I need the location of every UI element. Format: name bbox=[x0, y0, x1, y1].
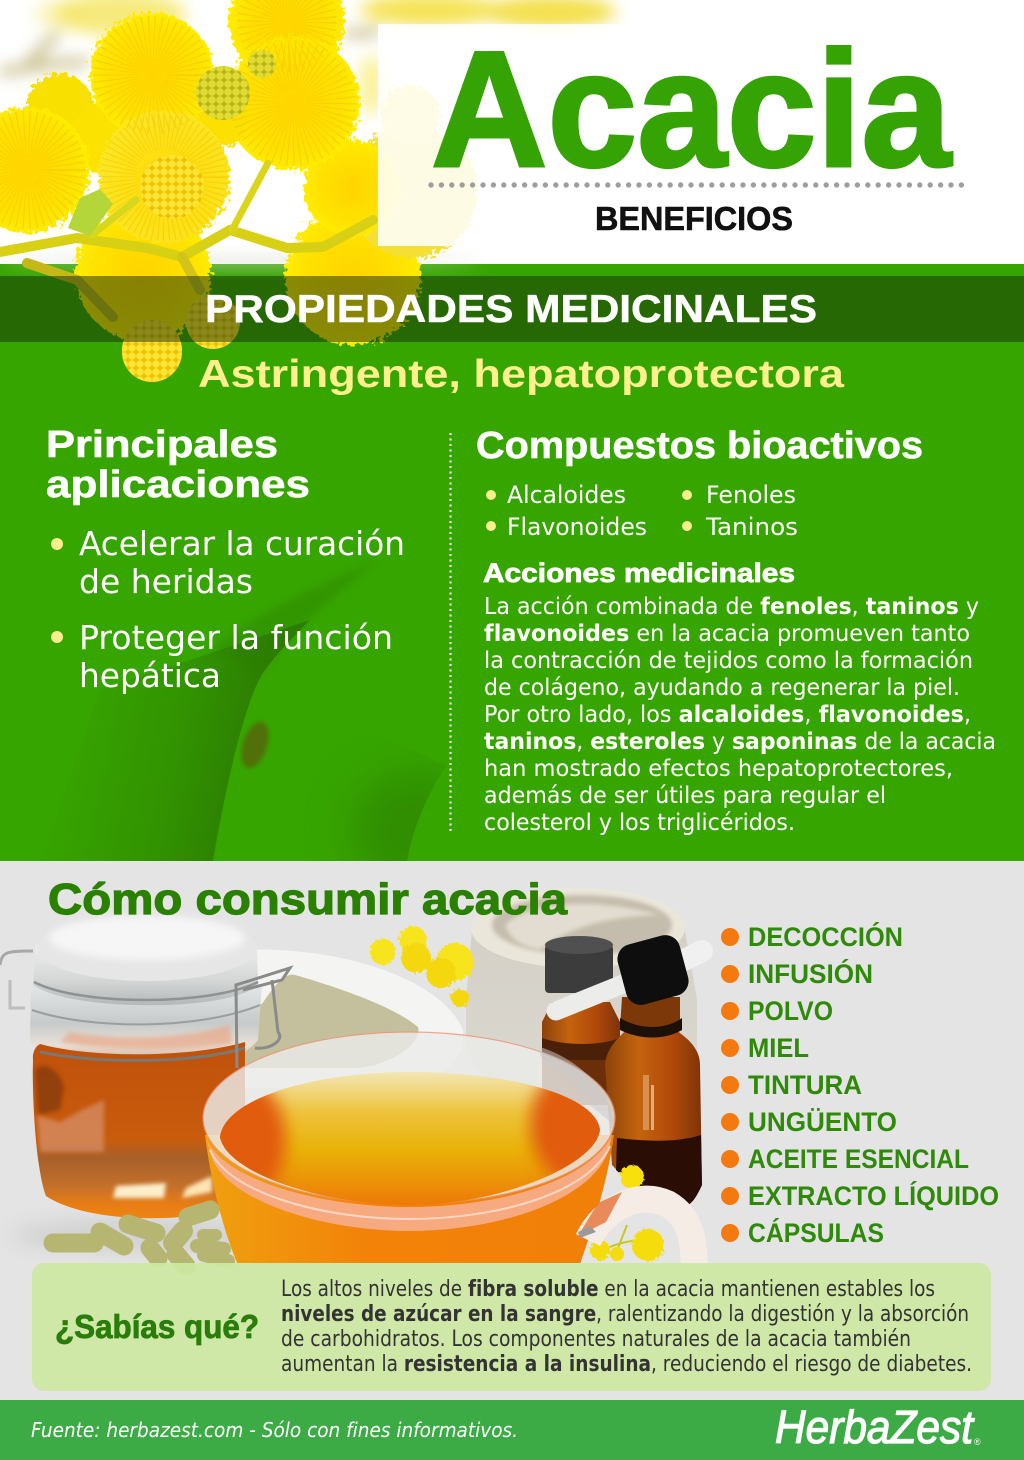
footer bbox=[0, 1400, 1024, 1460]
list: forms of consumption: TINTURA bbox=[748, 1070, 862, 1100]
compound list: Alcaloides bbox=[507, 481, 626, 509]
cup rim bbox=[203, 1032, 615, 1204]
compound list: Taninos bbox=[705, 513, 798, 541]
logo: HerbaZest: HerbaZest bbox=[775, 1401, 975, 1453]
photo: cup handle with flowers bbox=[578, 1165, 694, 1265]
photo: honey jar bbox=[0, 915, 290, 1218]
paragraph: medicinal actions bbox=[484, 594, 996, 836]
tea surface bbox=[220, 1072, 600, 1205]
photo: acacia flower pompoms bbox=[0, 0, 478, 380]
callout text: aumentan la resistencia a la insulina, reduciendo el riesgo de diabetes. bbox=[281, 1352, 972, 1377]
heading: medicinal actions: Acciones medicinales bbox=[483, 558, 795, 588]
column divider bbox=[450, 433, 452, 832]
callout heading: ¿Sabías qué? bbox=[55, 1308, 259, 1345]
photo: large amber bottle bbox=[556, 932, 702, 1205]
list: forms of consumption: UNGÜENTO bbox=[748, 1107, 897, 1137]
front lip bbox=[207, 1135, 612, 1231]
callout text: de carbohidratos. Los componentes naturales de la acacia también bbox=[281, 1327, 911, 1352]
jar neck bbox=[30, 985, 262, 1060]
callout: did you know bbox=[32, 1263, 991, 1391]
dotted divider bbox=[431, 182, 963, 188]
photo: soft floor shadow bbox=[10, 1219, 270, 1251]
bullet two: Proteger la función bbox=[79, 618, 393, 657]
list: forms of consumption: EXTRACTO LÍQUIDO bbox=[748, 1180, 999, 1211]
heading: principal applications: Principales bbox=[46, 424, 278, 466]
panel: green medicinal section bbox=[0, 264, 1024, 890]
paragraph: medicinal actions: la contracción de tejidos como la formación bbox=[484, 648, 973, 674]
dropper tube bbox=[556, 982, 628, 1011]
compound list: Flavonoides bbox=[507, 513, 647, 541]
heading: principal applications: aplicaciones bbox=[46, 464, 310, 506]
paragraph: medicinal actions: La acción combinada de fenoles, taninos y bbox=[484, 594, 979, 620]
bud below band bbox=[122, 347, 182, 382]
subheading: properties: Astringente, hepatoprotectora bbox=[198, 353, 844, 396]
bullet two bbox=[51, 618, 393, 695]
paragraph: medicinal actions: colesterol y los triglicéridos. bbox=[484, 810, 795, 836]
logo: HerbaZest: ® bbox=[974, 1437, 981, 1447]
callout text: niveles de azúcar en la sangre, ralentizando la digestión y la absorción bbox=[281, 1302, 969, 1327]
photo: blurred background flowers bbox=[0, 0, 616, 267]
compound list: Fenoles bbox=[706, 481, 796, 509]
photo: yellow flowers behind bowl bbox=[370, 926, 474, 1007]
heading: bioactive compounds: Compuestos bioactivos bbox=[476, 425, 923, 467]
flower buds bbox=[122, 50, 276, 380]
panel: main applications bbox=[46, 424, 405, 695]
subtitle: BENEFICIOS bbox=[595, 200, 793, 237]
bullet two: hepática bbox=[79, 656, 221, 695]
title: Acacia bbox=[431, 17, 952, 201]
list: forms of consumption: DECOCCIÓN bbox=[748, 921, 903, 952]
photo: small amber bottle bbox=[542, 936, 620, 1105]
photo: capsules bbox=[53, 1210, 228, 1266]
heading: medicinal properties: PROPIEDADES MEDICINALES bbox=[205, 288, 817, 331]
paragraph: medicinal actions: además de ser útiles para regular el bbox=[484, 783, 886, 809]
callout text: Los altos niveles de fibra soluble en la acacia mantienen estables los bbox=[281, 1277, 935, 1302]
list: forms of consumption: MIEL bbox=[748, 1033, 809, 1063]
paragraph: medicinal actions: flavonoides en la acacia promueven tanto bbox=[484, 621, 970, 647]
list: forms of consumption bbox=[721, 921, 999, 1248]
paragraph: medicinal actions: de colágeno, ayudando a regenerar la piel. bbox=[484, 675, 960, 701]
heading: how to consume: Cómo consumir acacia bbox=[48, 875, 568, 924]
paragraph: medicinal actions: han mostrado efectos hepatoprotectores, bbox=[484, 756, 953, 782]
list: forms of consumption: INFUSIÓN bbox=[748, 958, 873, 989]
bullet one bbox=[51, 524, 405, 601]
honey body bbox=[33, 1042, 245, 1218]
title panel bbox=[378, 24, 1024, 246]
branch bbox=[0, 163, 373, 317]
bullet one: Acelerar la curación bbox=[79, 524, 405, 563]
jar clasp bbox=[0, 951, 290, 1068]
list: forms of consumption: POLVO bbox=[748, 996, 833, 1026]
background photo: leaf shading bbox=[86, 570, 444, 861]
photo: bowl of powder bbox=[240, 949, 463, 1088]
photo: cream jar bbox=[466, 888, 697, 1112]
cup body bbox=[205, 1135, 614, 1270]
band: medicinal properties bbox=[0, 276, 1024, 342]
dropper cap bbox=[614, 932, 692, 1008]
list: forms of consumption: CÁPSULAS bbox=[748, 1217, 884, 1248]
list: forms of consumption: ACEITE ESENCIAL bbox=[748, 1144, 969, 1174]
leaf bud bbox=[68, 189, 113, 236]
paragraph: medicinal actions: Por otro lado, los alcaloides, flavonoides, bbox=[484, 702, 971, 728]
callout text bbox=[281, 1277, 972, 1377]
panel: how to consume bbox=[0, 861, 1024, 1400]
source note: Fuente: herbazest.com - Sólo con fines informativos. bbox=[31, 1418, 518, 1442]
jar lid bbox=[33, 945, 258, 1005]
bullet one: de heridas bbox=[79, 562, 253, 601]
compound list bbox=[486, 481, 798, 541]
photo: cup of tea bbox=[194, 1032, 630, 1270]
panel: bioactive compounds bbox=[476, 425, 996, 836]
pompom fibres bbox=[0, 0, 331, 223]
paragraph: medicinal actions: taninos, esteroles y saponinas de la acacia bbox=[484, 729, 996, 755]
pompoms behind bbox=[0, 0, 478, 345]
